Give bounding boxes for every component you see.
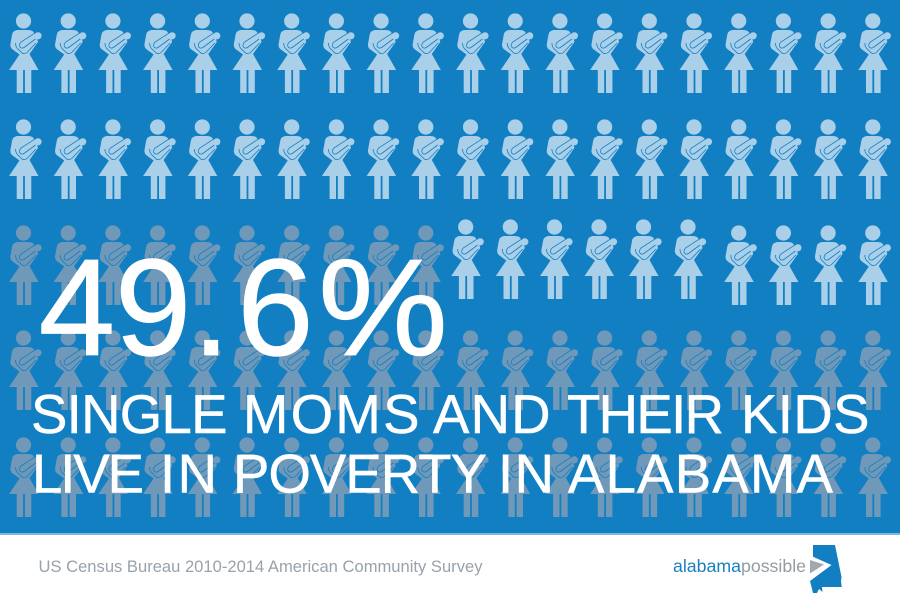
subheading line 1: AND (433, 384, 550, 445)
subheading line 1: MOMS (243, 384, 420, 445)
subheading line 1 (31, 384, 870, 445)
subheading line 1: THEIR (567, 384, 724, 445)
subheading line 2: IN (498, 444, 554, 504)
footer panel (0, 533, 900, 600)
pictogram row 5: muted mothers (9, 437, 891, 517)
subheading line 1: KIDS (741, 384, 870, 445)
logo wordmark: alabama (673, 556, 741, 576)
headline statistic: % (318, 231, 448, 385)
logo wordmark (673, 556, 806, 576)
pictogram row 1: highlighted mothers (9, 13, 891, 93)
subheading line 1: SINGLE (31, 384, 228, 445)
subheading line 2 (32, 444, 834, 504)
subheading line 2: IN (160, 444, 217, 504)
logo wordmark: possible (741, 556, 806, 576)
subheading line 2: LIVE (32, 444, 144, 504)
subheading line 2: ALABAMA (568, 444, 834, 504)
headline statistic (38, 231, 448, 385)
pictogram row 4: muted mothers (9, 330, 891, 410)
logo: Alabama state with arrow (808, 545, 842, 593)
headline statistic: 49.6 (38, 231, 314, 385)
pictogram row 3: muted and highlighted mothers (9, 219, 891, 305)
pictogram row 2: highlighted mothers (9, 119, 891, 199)
subheading line 2: POVERTY (233, 444, 487, 504)
source citation: US Census Bureau 2010-2014 American Community Survey (38, 558, 483, 576)
